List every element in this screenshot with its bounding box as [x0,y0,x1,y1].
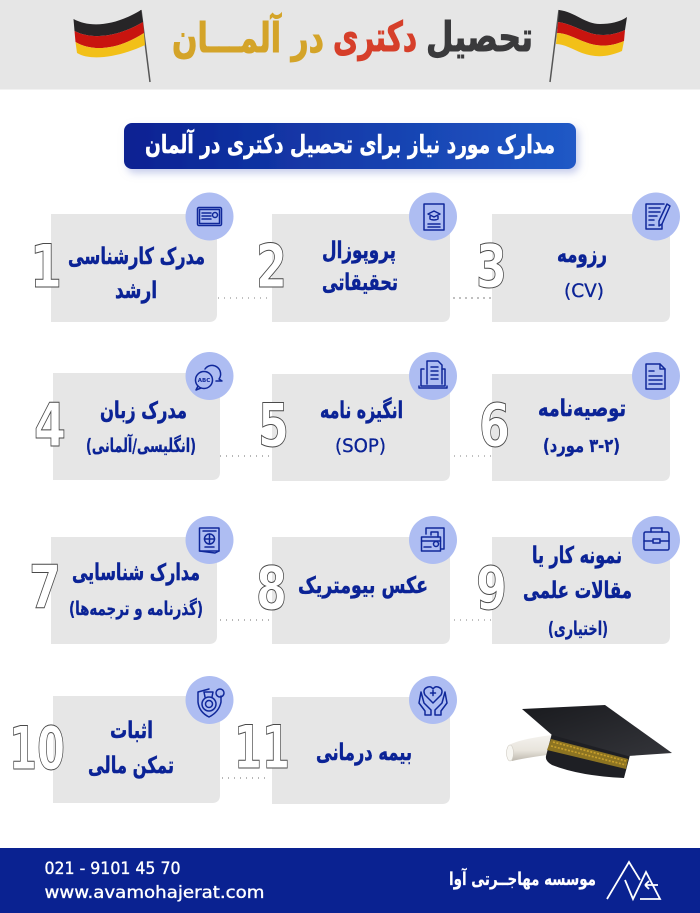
card 5: statement of purpose: (SOP) [335,435,386,457]
header band [0,0,700,90]
title: تحصیل [426,13,533,61]
card 11: health insurance: بیمه درمانی [316,740,412,766]
icon: right German flag [550,10,627,82]
card 7: identity documents [29,516,272,644]
section heading banner [124,123,576,169]
card 7: identity documents: 7 [29,553,61,623]
card 9: work samples or papers: نمونه کار یا [532,543,622,569]
card 3: CV: رزومه [557,242,607,268]
card 2: research proposal: پروپوزال [322,238,396,264]
graduation cap with diploma scroll [506,705,672,778]
card 3: CV: 3 [476,232,507,302]
card 1: master's degree: مدرک کارشناسی [68,244,205,270]
card 4: language certificate: 4 [34,391,66,461]
card 2: research proposal: 2 [256,232,287,302]
card 6: recommendation letters: (۲‏-‏۳ مورد) [543,435,620,457]
card 4: language certificate: (انگلیسی/آلمانی) [86,433,196,457]
card 4: language certificate: مدرک زبان [100,398,187,424]
card 5: statement of purpose: 5 [258,391,289,461]
contact details: www.avamohajerat.com [44,883,264,903]
card 2: research proposal: تحقیقاتی [322,270,398,296]
card 10: financial proof [9,676,270,803]
card 10: financial proof: 10 [9,714,65,784]
card 5: statement of purpose: انگیزه نامه [320,397,403,424]
card 8: biometric photo [220,516,457,644]
card 9: work samples or papers: مقالات علمی [523,578,632,604]
card 2: research proposal [256,192,492,322]
card 11: health insurance: 11 [234,713,290,783]
title: دکتری [333,13,417,61]
card 9: work samples or papers: 9 [476,554,507,624]
card 10: financial proof: اثبات [110,718,153,744]
card 1: master's degree: 1 [30,232,62,302]
card 7: identity documents: (گذرنامه و ترجمه‌ها) [69,597,203,620]
footer band [0,848,700,913]
contact details: 021 - 9101 45 70 [44,859,180,879]
card 3: CV [454,192,680,322]
card 3: CV: (CV) [564,280,604,302]
card 6: recommendation letters [454,352,680,481]
contact details [44,859,264,903]
card 11: health insurance [222,676,457,804]
card 6: recommendation letters: 6 [479,391,510,461]
card 8: biometric photo: 8 [256,554,287,624]
icon: left German flag [74,10,150,82]
card 1: master's degree [30,192,272,322]
card 1: master's degree: ارشد [115,278,157,304]
card 9: work samples or papers: (اختیاری) [548,618,608,640]
icon: organisation logo [607,862,660,899]
card 7: identity documents: مدارک شناسایی [72,560,200,586]
title: در آلمـــان [172,13,324,62]
card 5: statement of purpose [220,352,457,481]
card 4: language certificate [34,352,272,480]
section heading banner: مدارک مورد نیاز برای تحصیل دکتری در آلمان [145,129,555,160]
card 10: financial proof: تمکن مالی [88,753,174,779]
card 8: biometric photo: عکس بیومتریک [298,573,428,599]
title [172,13,533,62]
card 4: language certificate: ABC [198,378,210,384]
card 6: recommendation letters: توصیه‌نامه [538,396,626,422]
card 9: work samples or papers [454,516,680,644]
organisation name: موسسه مهاجــرتی آوا [449,867,596,890]
